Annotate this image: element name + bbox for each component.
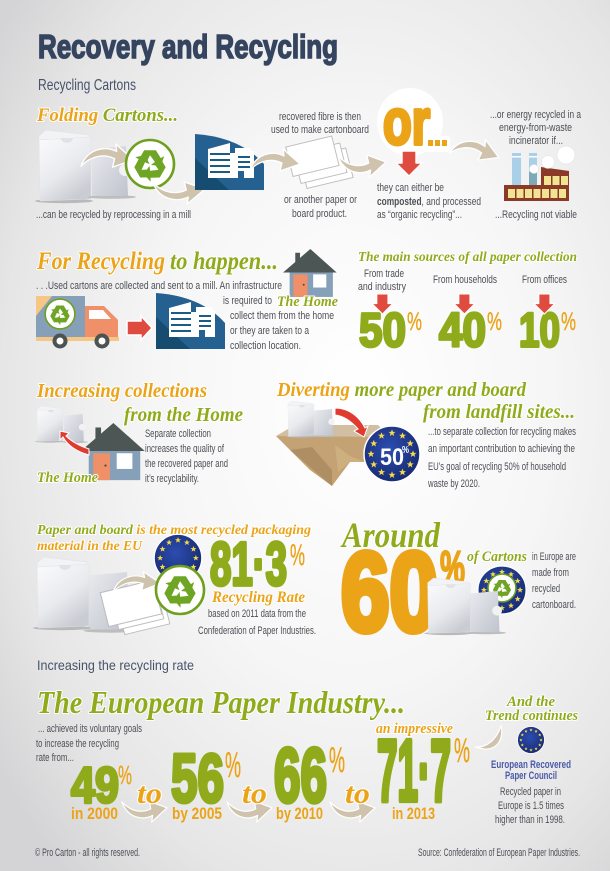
arrow: mill to paper [250, 149, 300, 171]
text: another product: board product. [292, 208, 347, 220]
text: composted: they can either be [377, 182, 444, 194]
panel: most recycled packaging [33, 522, 316, 637]
text: another product [284, 194, 357, 220]
text: data source: based on 2011 data from the [208, 608, 306, 620]
label: European Recovered Paper Council [491, 759, 571, 782]
arrow: 2010 to 2013 [330, 777, 375, 822]
icon: EU 50 percent [364, 426, 420, 482]
stat: 10 percent: % [561, 308, 576, 336]
text: composted: composted, and processed [377, 196, 481, 208]
heading: for recycling: For Recycling [36, 248, 165, 275]
arrow: paper to or [338, 155, 386, 177]
icon: EU flag circle [154, 534, 202, 582]
stat: 66 percent by 2010: by 2010 [276, 804, 323, 823]
icon: factory [504, 146, 575, 201]
text: recovered fibre: used to make cartonboard [271, 124, 369, 136]
label: European Recovered Paper Council: European Recovered [491, 759, 571, 771]
text: EU goal: waste by 2020. [427, 478, 480, 490]
icon: red down arrow [396, 151, 422, 176]
icon: recycling badge [156, 566, 204, 614]
labels: sources: From trade [364, 268, 404, 280]
text: infrastructure: or they are taken to a [230, 325, 310, 337]
text: in Europe: recycled [532, 583, 560, 595]
arrow: 2000 to 2005 [122, 777, 167, 822]
heading: paper and board: Paper and board is the most recycled packaging [37, 522, 311, 537]
labels: sources: From households [433, 274, 497, 286]
panel: diverting paper from landfill [276, 380, 576, 490]
text: in Europe: in Europe are [532, 551, 576, 563]
text: composted: as “organic recycling”... [377, 209, 462, 221]
icon: mill [195, 134, 264, 190]
icon: cartons and papers [33, 557, 170, 635]
stat: 56 percent by 2005: 56 [171, 739, 224, 817]
arrow: to incinerator [449, 133, 502, 164]
title: Recovery and Recycling [38, 29, 338, 66]
stat: 50 percent [359, 294, 422, 357]
panel: increasing collections [35, 381, 243, 486]
text: data source: Confederation of Paper Industries. [198, 625, 316, 637]
text: separate collection [145, 428, 228, 485]
text: infrastructure: is required to [223, 295, 272, 307]
heading: and the trend continues: Trend continues [485, 708, 578, 724]
caption: not viable: ...Recycling not viable [495, 209, 577, 221]
icon: EU recycling badge [478, 566, 526, 614]
labels: sources: and industry [358, 281, 406, 293]
stat: 10 percent [519, 294, 576, 358]
text: recovered fibre [271, 111, 369, 136]
text: data source [198, 608, 316, 637]
heading: for recycling: to happen... [170, 248, 278, 275]
arrow: recycling to mill [153, 182, 205, 204]
heading: paper and board [37, 522, 311, 553]
heading: around: Around [340, 515, 441, 555]
stat: 56 percent by 2005: % [225, 746, 241, 785]
heading: European paper industry: The European Paper Industry... [37, 684, 405, 720]
icon: landfill [276, 425, 390, 486]
text: composted [377, 182, 481, 221]
icon: mill [156, 293, 225, 349]
heading: diverting [276, 380, 575, 423]
stat: 50 percent: 50 [359, 303, 406, 357]
icon: cartons [286, 401, 337, 438]
footer: copyright: © Pro Carton - all rights reserved. [35, 847, 140, 859]
icon: EU circle [518, 727, 544, 753]
arrow: trend [475, 726, 502, 749]
heading: increasing collections: from the Home [124, 405, 243, 426]
stat: 49 percent in 2000 [71, 756, 132, 823]
label: recycling rate: Recycling Rate [211, 589, 305, 606]
icon: paper stack [286, 136, 353, 188]
text: energy [490, 109, 582, 147]
heading: increasing the recycling rate: Increasing the recycling rate [37, 657, 194, 673]
arrow: cartons to 50 percent [335, 408, 368, 437]
stat: 40 percent: % [487, 308, 502, 336]
icon: EU 50 percent: % [402, 445, 409, 456]
arrow: carton to recycling [81, 144, 134, 167]
panel: for recycling to happen [36, 248, 339, 352]
text: infrastructure: collection location. [230, 340, 301, 352]
text: 1.5 times: higher than in 1998. [495, 814, 565, 826]
text: infrastructure: collect them from the home [230, 310, 334, 322]
heading: and the trend continues: And the [506, 694, 556, 710]
stat: 60 percent: % [440, 541, 465, 593]
icon: house [283, 249, 337, 297]
text: 1.5 times: Recycled paper in [500, 786, 561, 798]
icon: house [81, 423, 145, 480]
text: energy: energy-from-waste [499, 122, 572, 134]
callout: or: or [383, 87, 430, 159]
heading: and the trend continues [485, 694, 578, 724]
stat: 66 percent by 2010: 66 [274, 732, 327, 819]
icon: carton pair [35, 130, 136, 203]
stat: 60 percent: 60 [341, 531, 438, 655]
text: separate collection: it’s recyclability. [145, 473, 199, 485]
stat: 50 percent: % [407, 308, 422, 336]
stat: 49 percent in 2000: % [118, 760, 132, 790]
text: voluntary goals: rate from... [36, 752, 74, 764]
text: energy: incinerator if... [509, 135, 563, 147]
arrow: 2000 to 2005: to [137, 777, 162, 810]
text: separate collection: Separate collection [145, 428, 211, 440]
heading: diverting: Diverting more paper and board [276, 380, 526, 401]
stat: 66 percent by 2010: % [329, 741, 345, 780]
labels: sources: From offices [522, 274, 567, 286]
icon: truck [36, 296, 119, 348]
text: another product: or another paper or [284, 194, 357, 206]
text: EU goal [427, 426, 576, 490]
label: the home: The Home [37, 470, 99, 486]
label: European Recovered Paper Council: Paper Council [505, 770, 557, 782]
text: in Europe: made from [532, 567, 569, 579]
text: voluntary goals: to increase the recycling [36, 738, 119, 750]
text: voluntary goals [36, 723, 142, 764]
icon: cartons [35, 406, 88, 443]
labels: sources [358, 268, 567, 293]
stat: 71.7 percent in 2013: in 2013 [392, 804, 435, 823]
stat: 71.7 percent in 2013: 71·7 [377, 722, 451, 820]
panel: European paper industry timeline [36, 684, 470, 823]
heading: increasing collections [36, 381, 243, 426]
stat: 81.3 percent: 81·3 [210, 530, 287, 598]
callout: or [377, 87, 450, 159]
heading: diverting: from landfill sites... [423, 402, 575, 423]
icon: recycling badge [126, 140, 174, 188]
arrow: to recycling [112, 571, 161, 593]
stat: 71.7 percent in 2013: % [454, 732, 470, 770]
stat: 40 percent: 40 [439, 303, 486, 357]
stat: 71.7 percent in 2013: an impressive [376, 721, 454, 737]
text: 1.5 times [495, 786, 565, 826]
stat: 49 percent in 2000: in 2000 [71, 804, 118, 823]
heading: main sources: The main sources of all paper collection [358, 250, 577, 265]
heading: recycling cartons: Recycling Cartons [38, 77, 136, 94]
stat: 56 percent by 2005: by 2005 [172, 804, 222, 823]
text: energy: ...or energy recycled in a [490, 109, 582, 121]
heading: paper and board: material in the EU [37, 538, 143, 553]
panel: trend continues [475, 694, 578, 826]
icon: cartons [424, 578, 506, 635]
text: voluntary goals: ... achieved its voluntary goals [38, 723, 142, 735]
text: infrastructure [223, 294, 339, 352]
stat: 10 percent: 10 [519, 305, 560, 358]
arrow: 2005 to 2010 [227, 777, 272, 822]
panel: main sources of paper collection [358, 250, 577, 358]
arrow: 2005 to 2010: to [242, 777, 267, 810]
panel: around 60 percent [340, 515, 576, 655]
heading: for recycling [36, 248, 278, 275]
panel: folding cartons flow [35, 87, 582, 221]
text: infrastructure: The Home [277, 294, 339, 310]
icon: EU 50 percent: 50 [380, 444, 404, 471]
arrow: house to cartons [60, 431, 89, 455]
text: recovered fibre: recovered fibre is then [279, 111, 361, 123]
text: in Europe: cartonboard. [532, 599, 576, 611]
text: separate collection: increases the quality of [145, 443, 225, 455]
stat: 40 percent [439, 294, 502, 357]
arrow: truck to mill [127, 316, 152, 340]
text: in Europe [532, 551, 576, 611]
text: 1.5 times: Europe is 1.5 times [498, 800, 564, 812]
caption: reprocessing: ...can be recycled by reprocessing in a mill [36, 209, 191, 221]
heading: folding cartons: Folding Cartons... [36, 105, 178, 126]
text: used cartons: . . .Used cartons are collected and sent to a mill. An infrastructure [36, 280, 282, 292]
stat: 81.3 percent: % [290, 539, 305, 572]
label: of cartons: of Cartons [467, 549, 527, 565]
stat: 49 percent in 2000: 49 [71, 756, 119, 813]
heading: increasing collections: Increasing collections [36, 381, 207, 402]
text: separate collection: the recovered paper and [145, 458, 228, 470]
arrow: 2010 to 2013: to [345, 777, 370, 810]
